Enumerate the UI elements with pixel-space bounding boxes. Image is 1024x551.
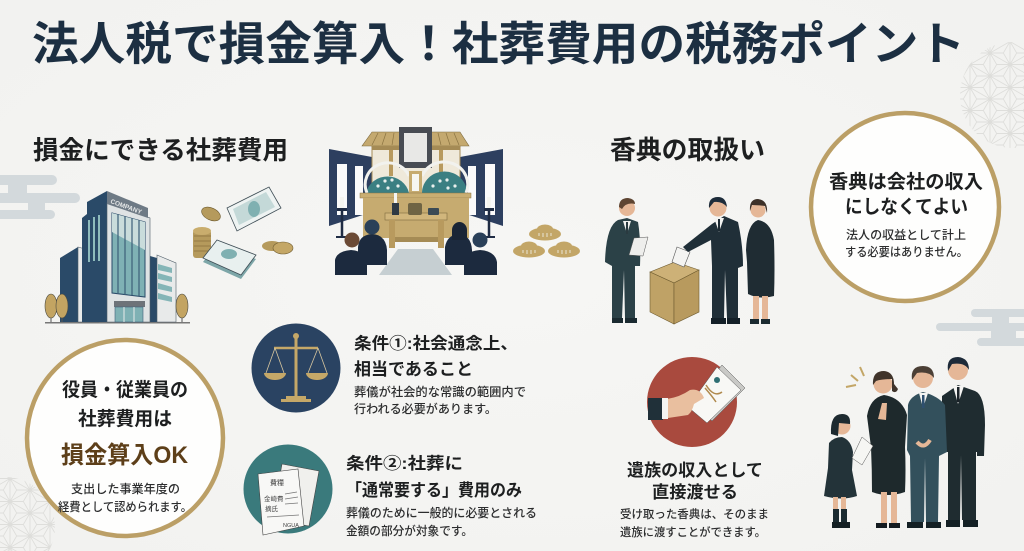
text block: condition 1: 葬儀が社会的な常識の範囲内で — [354, 384, 526, 399]
callout circle: deductible OK: 社葬費用は — [78, 408, 172, 430]
collection box — [650, 262, 699, 283]
text block: hand directly to family: 直接渡せる — [652, 482, 738, 502]
icon: hand passing envelope — [647, 357, 745, 447]
callout circle: condolence money not income: 法人の収益として計上 — [846, 227, 966, 242]
hemp-leaf pattern top right — [960, 42, 1024, 148]
trees — [45, 294, 188, 318]
heading: condolence money: 香典の取扱い — [610, 135, 765, 165]
text block: condition 1: 条件①:社会通念上、 — [354, 333, 518, 353]
callout circle: deductible OK: 経費として認められます。 — [58, 499, 192, 514]
text block: hand directly to family: 遺族の収入として — [627, 461, 763, 480]
girl — [824, 437, 857, 498]
icon: pine motif — [513, 224, 580, 258]
illustration: bereaved family — [824, 357, 985, 528]
text block: condition 2: 条件②:社葬に — [346, 453, 463, 473]
icon: company building — [45, 191, 190, 324]
table and offerings — [385, 213, 447, 220]
heading: deductible funeral expenses: 損金にできる社葬費用 — [33, 137, 288, 165]
callout circle: deductible OK: 支出した事業年度の — [71, 481, 180, 496]
company sign: COMPANY — [109, 198, 143, 216]
callout circle: condolence money not income: にしなくてよい — [845, 196, 968, 218]
hemp-leaf pattern bottom left — [0, 477, 55, 551]
cloud motif right — [936, 309, 1024, 346]
illustration: receiving condolence money — [605, 197, 774, 324]
woman in black — [746, 220, 774, 298]
floor mat — [379, 249, 452, 275]
flower arcs — [366, 176, 409, 193]
text block: hand directly to family: 遺族に渡すことができます。 — [620, 525, 766, 539]
altar frame — [372, 146, 460, 193]
text block: hand directly to family: 受け取った香典は、そのまま — [620, 507, 769, 521]
callout circle: deductible OK: 損金算入OK — [61, 442, 189, 469]
text block: hand directly to family — [620, 461, 769, 539]
text block: condition 2 — [346, 453, 537, 538]
icon: money and coins — [193, 187, 293, 279]
callout circle: deductible OK: 役員・従業員の — [62, 379, 188, 401]
man middle — [907, 392, 947, 522]
title: 法人税で損金算入！社葬費用の税務ポイント — [32, 18, 965, 70]
icon: receipts: 金崎費 — [264, 494, 284, 503]
text block: condition 2: 葬儀のために一般的に必要とされる — [346, 505, 537, 520]
text block: condition 2: 金額の部分が対象です。 — [346, 523, 473, 538]
callout circle: condolence money not income — [811, 113, 999, 301]
text block: condition 1 — [354, 333, 526, 416]
callout circle: condolence money not income: する必要はありません。 — [845, 245, 968, 259]
side banners — [329, 149, 372, 226]
candle stands — [342, 210, 489, 237]
icon: scales — [252, 324, 340, 412]
cloud motif left — [0, 175, 80, 219]
icon: receipts — [244, 444, 332, 535]
text block: condition 2: 「通常要する」費用のみ — [346, 481, 522, 500]
callout circle: deductible OK — [27, 340, 223, 536]
icon: funeral altar — [329, 127, 503, 275]
man right — [942, 385, 985, 520]
icon: receipts: 摘氏 — [265, 504, 278, 513]
text block: condition 1: 行われる必要があります。 — [354, 401, 497, 416]
callout circle: condolence money not income: 香典は会社の収入 — [829, 171, 983, 193]
icon: receipts: NGUA — [283, 523, 299, 529]
woman centre — [867, 395, 907, 495]
man with document — [605, 218, 640, 318]
altar body — [360, 193, 471, 198]
gratitude marks — [846, 367, 864, 387]
text block: condition 1: 相当であること — [354, 360, 473, 379]
seated mourners — [358, 234, 387, 265]
man putting envelope in box — [683, 216, 743, 318]
portrait — [399, 127, 432, 168]
icon: receipts: 費糧 — [270, 478, 284, 487]
